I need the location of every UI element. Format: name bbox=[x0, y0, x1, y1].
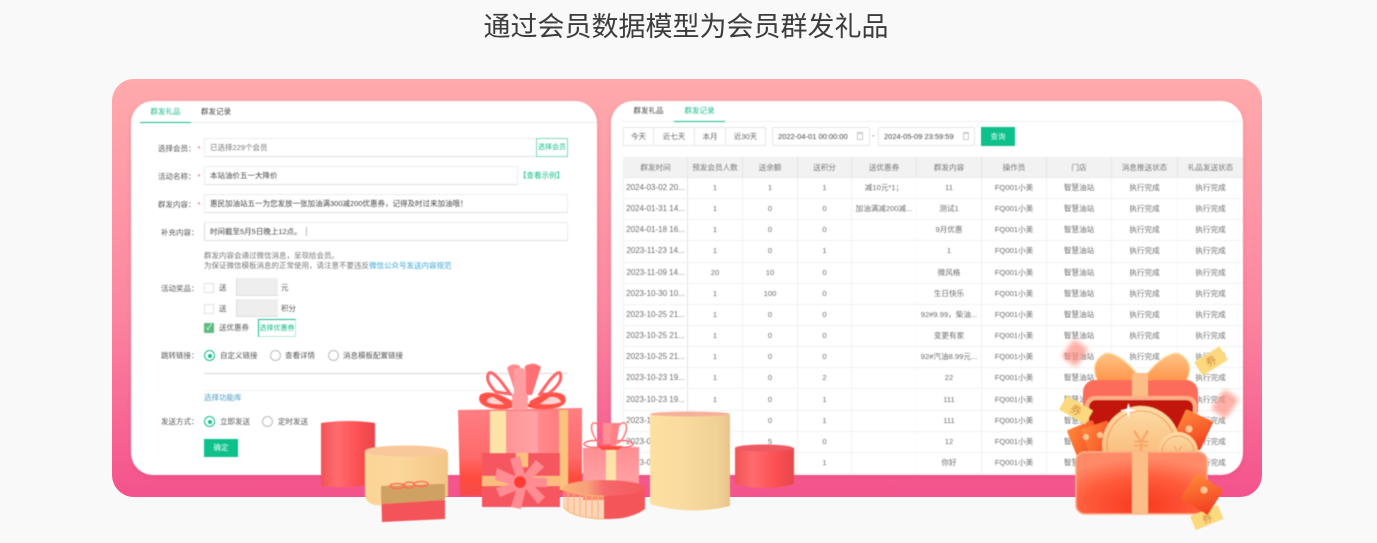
records table: 执行完成 bbox=[1195, 458, 1226, 467]
form tabs bbox=[140, 101, 597, 123]
records table: 智慧油站 bbox=[1064, 289, 1094, 298]
icon: red envelope left bbox=[1067, 420, 1119, 463]
records table: FQ001小美 bbox=[995, 437, 1033, 446]
records table: 0 bbox=[822, 437, 827, 446]
field: campaign prizes: 积分 bbox=[281, 304, 296, 313]
icon: red envelope bottom right bbox=[1180, 473, 1224, 515]
records table: 2023-09-20 10... bbox=[626, 437, 685, 446]
records table: 执行完成 bbox=[1129, 352, 1160, 361]
records table: 0 bbox=[768, 394, 772, 404]
icon: red cylinder left bbox=[321, 421, 375, 487]
records table: 执行完成 bbox=[1195, 310, 1226, 319]
records table: 执行完成 bbox=[1129, 268, 1160, 277]
panel: send gift form bbox=[131, 101, 597, 475]
records table: 0 bbox=[768, 416, 772, 425]
icon: small yuan coin bbox=[1158, 432, 1198, 472]
date range inputs: 2022-04-01 00:00:00 bbox=[778, 132, 848, 141]
records table: 2023-11-09 14... bbox=[626, 268, 685, 277]
records table: FQ001小美 bbox=[995, 204, 1033, 213]
records table: 微风格 bbox=[938, 268, 960, 277]
icon: ticket bottom right bbox=[1190, 505, 1224, 530]
active tab: send records bbox=[674, 101, 725, 122]
help text bbox=[204, 251, 452, 270]
date range shortcuts: 本月 bbox=[702, 132, 718, 141]
icon: short red cylinder bbox=[735, 444, 794, 488]
icon: right open gift box with coins bbox=[1059, 339, 1239, 530]
records table: 门店 bbox=[1071, 163, 1087, 172]
records table: 消息推送状态 bbox=[1122, 163, 1167, 172]
records table: 2024-01-18 16... bbox=[626, 225, 685, 234]
records table: 1 bbox=[713, 331, 717, 340]
records table: 92#汽油8.99元... bbox=[921, 352, 977, 361]
records table: 群发时间 bbox=[640, 163, 671, 172]
field: select members: 选择会员 bbox=[538, 144, 566, 151]
records table: 2024-01-31 14... bbox=[626, 204, 685, 213]
date range shortcuts: 今天 bbox=[631, 132, 646, 141]
records table: 5 bbox=[768, 437, 772, 446]
field: extra content: 补充内容： bbox=[161, 228, 198, 237]
field: campaign prizes bbox=[160, 278, 296, 338]
panel: pink gradient backdrop bbox=[112, 79, 1262, 497]
icon: small yuan coin: ¥ bbox=[1173, 444, 1183, 461]
records table: 1 bbox=[713, 289, 717, 298]
records table: 1 bbox=[713, 204, 717, 213]
records table: 1 bbox=[713, 352, 717, 361]
records table: 0 bbox=[822, 225, 827, 234]
field: select members: 已选择229个会员 bbox=[210, 143, 268, 152]
query button: 查询 bbox=[990, 132, 1006, 141]
icon: large yuan coin: ¥ bbox=[1132, 425, 1150, 458]
field: message content: 群发内容： * bbox=[158, 200, 200, 209]
records table: 92#9.99，柴油... bbox=[921, 310, 977, 319]
records table: 智慧油站 bbox=[1064, 373, 1094, 382]
records table: 1 bbox=[713, 246, 717, 255]
confirm button bbox=[204, 439, 238, 457]
records table: FQ001小美 bbox=[995, 183, 1033, 192]
records table: 生日快乐 bbox=[934, 289, 964, 298]
records table: 执行完成 bbox=[1129, 204, 1160, 213]
records table: 1 bbox=[713, 394, 717, 404]
records table: 0 bbox=[822, 289, 827, 298]
records table: 1 bbox=[713, 416, 717, 425]
icon: blurred red diamond right bbox=[1211, 389, 1239, 419]
records table: FQ001小美 bbox=[995, 416, 1033, 425]
date range inputs: 2024-05-09 23:59:59 bbox=[884, 132, 954, 141]
tab: send records: 群发记录 bbox=[201, 107, 231, 116]
records table: 执行完成 bbox=[1195, 352, 1226, 361]
records table: 0 bbox=[768, 225, 772, 234]
field: message content bbox=[158, 194, 568, 214]
icon: tall tan cylinder bbox=[650, 412, 730, 511]
records table: 群发内容 bbox=[934, 163, 964, 172]
field: campaign prizes: 送 bbox=[219, 304, 226, 313]
records table: 1 bbox=[822, 183, 827, 192]
records table: 2023-10-23 19... bbox=[626, 373, 685, 382]
field: jump link: 查看详情 bbox=[285, 351, 315, 360]
active tab: send gift bbox=[140, 101, 191, 123]
records table: FQ001小美 bbox=[995, 373, 1033, 382]
field: campaign prizes: ✓ bbox=[206, 323, 212, 332]
records table: 执行完成 bbox=[1195, 268, 1226, 277]
icon: middle gift box with flower bow bbox=[482, 453, 560, 509]
records table: 送优惠券 bbox=[869, 163, 899, 172]
field: campaign prizes: 选择优惠券 bbox=[260, 325, 294, 332]
tab: send gift: 群发礼品 bbox=[634, 106, 664, 115]
records table: 2023-10-23 19... bbox=[626, 416, 685, 425]
records table: 智慧油站 bbox=[1064, 204, 1094, 213]
field: campaign name: 本站油价五一大降价 bbox=[210, 171, 278, 180]
records table: 智慧油站 bbox=[1064, 268, 1094, 277]
record tabs bbox=[623, 101, 1243, 122]
records table: 预发会员人数 bbox=[692, 163, 738, 172]
records table: 1 bbox=[768, 183, 772, 192]
records table: 执行完成 bbox=[1195, 246, 1226, 255]
records table: 测试1 bbox=[939, 204, 959, 213]
records table: 智慧油站 bbox=[1064, 225, 1094, 234]
records table: 0 bbox=[822, 310, 827, 319]
field: send method: 定时发送 bbox=[278, 417, 308, 426]
records table: FQ001小美 bbox=[995, 268, 1033, 277]
records table: 111 bbox=[943, 416, 955, 425]
records table: 执行完成 bbox=[1129, 458, 1160, 467]
records table: 送积分 bbox=[813, 163, 836, 172]
field: campaign name: 活动名称： * bbox=[158, 172, 200, 181]
records table: 智慧油站 bbox=[1064, 352, 1094, 361]
field: jump link: 跳转链接： bbox=[161, 351, 198, 360]
icon: round wire box bbox=[563, 480, 645, 519]
icon: ticket top right: 券 bbox=[1202, 351, 1220, 371]
records table: 2023-10-23 19... bbox=[626, 394, 685, 404]
records table: 1 bbox=[713, 458, 717, 467]
date range shortcuts: 近七天 bbox=[663, 132, 685, 141]
field: message content: 惠民加油站五一为您发放一张加油满300减200优惠券，记得及时过来加油哦！ bbox=[210, 199, 468, 208]
records table: 执行完成 bbox=[1129, 183, 1160, 192]
records table: 智慧油站 bbox=[1064, 458, 1094, 467]
records table: 智慧油站 bbox=[1064, 310, 1094, 319]
field: send method bbox=[160, 415, 308, 428]
records table: FQ001小美 bbox=[995, 246, 1033, 255]
records table: 1 bbox=[713, 183, 717, 192]
field: campaign prizes: 送 bbox=[219, 283, 226, 292]
records table: 2023-10-25 21... bbox=[626, 352, 685, 361]
records table: 0 bbox=[768, 310, 772, 319]
records table: 操作员 bbox=[1003, 163, 1025, 172]
records table: 执行完成 bbox=[1195, 394, 1226, 404]
icon: red envelope right bbox=[1173, 409, 1213, 451]
date range shortcuts bbox=[623, 127, 766, 146]
date range inputs: - bbox=[872, 131, 874, 140]
icon: left gift group bbox=[321, 364, 794, 522]
field: jump link: 消息模板配置链接 bbox=[343, 351, 403, 360]
records table: 0 bbox=[768, 246, 772, 255]
records table: 0 bbox=[768, 352, 772, 361]
records table: 智慧油站 bbox=[1064, 183, 1094, 192]
date range shortcuts: 近30天 bbox=[734, 132, 757, 141]
field: jump link bbox=[160, 349, 568, 402]
records table: 1 bbox=[822, 458, 827, 467]
icon: ticket left bbox=[1059, 396, 1093, 424]
field: select members: 选择会员： * bbox=[158, 144, 200, 153]
records table: 2 bbox=[822, 373, 827, 382]
records table: FQ001小美 bbox=[995, 352, 1033, 361]
records table: 1 bbox=[713, 225, 717, 234]
help text: 群发内容会通过微信消息，呈现给会员。 bbox=[204, 251, 339, 260]
records table: FQ001小美 bbox=[995, 289, 1033, 298]
icon: ticket top right bbox=[1194, 346, 1228, 376]
records table: 100 bbox=[764, 289, 776, 298]
records table: 减10元*1； bbox=[865, 183, 903, 192]
records table: 执行完成 bbox=[1195, 289, 1226, 298]
records table: 0 bbox=[822, 331, 827, 340]
icon: box body bbox=[1076, 452, 1207, 514]
icon: open lid bbox=[1083, 373, 1198, 458]
icon: gift bow bbox=[1094, 353, 1190, 382]
records table: 10 bbox=[766, 268, 774, 277]
records table: 执行完成 bbox=[1195, 373, 1226, 382]
records table: 12 bbox=[945, 437, 953, 446]
records table: 2023-10-25 21... bbox=[626, 331, 685, 340]
field: jump link: 选择功能库 bbox=[204, 393, 242, 402]
icon: small right gift box bbox=[583, 421, 639, 500]
records table: 智慧油站 bbox=[1064, 394, 1094, 404]
records table: 执行完成 bbox=[1195, 416, 1226, 425]
query button bbox=[981, 127, 1015, 146]
records table: 2023-11-23 14... bbox=[626, 246, 685, 255]
records table: 送余额 bbox=[759, 163, 781, 172]
active tab: send records: 群发记录 bbox=[684, 106, 714, 115]
records table: FQ001小美 bbox=[995, 458, 1033, 467]
records table: 1 bbox=[713, 437, 717, 446]
icon: large yuan coin bbox=[1102, 406, 1180, 484]
records table: 执行完成 bbox=[1195, 225, 1226, 234]
records table: FQ001小美 bbox=[995, 331, 1033, 340]
records table: 执行完成 bbox=[1195, 183, 1226, 192]
records table: 变更有家 bbox=[934, 331, 964, 340]
records table: 你好 bbox=[941, 458, 957, 467]
field: campaign prizes: 送优惠券 bbox=[219, 323, 249, 332]
records table: 1 bbox=[947, 246, 951, 255]
records table: 执行完成 bbox=[1195, 437, 1226, 446]
records table: 2024-03-02 20... bbox=[626, 183, 685, 192]
records table: FQ001小美 bbox=[995, 310, 1033, 319]
records table: 0 bbox=[822, 204, 827, 213]
field: campaign name: 【查看示例】 bbox=[519, 171, 564, 180]
records table: 9月优惠 bbox=[935, 225, 962, 234]
panel: send records table bbox=[611, 101, 1243, 475]
icon: small gift box bbox=[381, 482, 445, 522]
records table: 2023-10-25 21... bbox=[626, 310, 685, 319]
records table: FQ001小美 bbox=[995, 394, 1033, 404]
records table bbox=[623, 157, 1243, 474]
records table: 11 bbox=[945, 183, 953, 192]
records table: 智慧油站 bbox=[1064, 416, 1094, 425]
records table: 执行完成 bbox=[1129, 246, 1160, 255]
records table: 1 bbox=[713, 373, 717, 382]
field: campaign name bbox=[158, 166, 564, 186]
records table: 0 bbox=[822, 352, 827, 361]
field: extra content: 时间截至5月5日晚上12点。 bbox=[210, 227, 302, 236]
records table: 执行完成 bbox=[1129, 331, 1160, 340]
records table: 0 bbox=[768, 373, 772, 382]
records table: 执行完成 bbox=[1129, 394, 1160, 404]
icon: large gift box bbox=[458, 408, 582, 496]
icon: ticket left: 券 bbox=[1067, 400, 1085, 420]
field: send method: 发送方式： bbox=[161, 417, 198, 426]
confirm button: 确定 bbox=[214, 443, 228, 452]
records table: 加油满减200减... bbox=[856, 204, 912, 213]
records table: 1 bbox=[822, 416, 827, 425]
records table: 1 bbox=[713, 310, 717, 319]
icon: large gift bow bbox=[479, 364, 566, 410]
icon: tan cylinder bbox=[365, 446, 448, 506]
field: jump link: 自定义链接 bbox=[220, 351, 258, 360]
icon: sparkle bbox=[1120, 403, 1137, 418]
records table: 执行完成 bbox=[1129, 310, 1160, 319]
records table: 1 bbox=[822, 246, 827, 255]
field: send method: 立即发送 bbox=[220, 417, 250, 426]
records table: 执行完成 bbox=[1129, 437, 1160, 446]
icon: ticket bottom right: 券 bbox=[1199, 509, 1214, 526]
records table: 2023-09-12 16... bbox=[626, 458, 685, 467]
records table: 智慧油站 bbox=[1064, 437, 1094, 446]
date range inputs bbox=[772, 127, 975, 146]
field: select members bbox=[158, 137, 569, 158]
records table: 智慧油站 bbox=[1064, 246, 1094, 255]
field: campaign prizes: 活动奖品： bbox=[161, 284, 198, 293]
help text: 为保证微信模板消息的正常使用，请注意不要违反微信公众号发送内容规范 bbox=[204, 261, 452, 270]
records table: 执行完成 bbox=[1129, 225, 1160, 234]
records table: 0 bbox=[822, 268, 827, 277]
records table: 执行完成 bbox=[1129, 416, 1160, 425]
records table: 111 bbox=[943, 394, 955, 404]
records table: 20 bbox=[711, 268, 719, 277]
icon: blurred red diamond left bbox=[1061, 339, 1089, 367]
active tab: send gift: 群发礼品 bbox=[150, 107, 180, 116]
records table: FQ001小美 bbox=[995, 225, 1033, 234]
records table: 22 bbox=[945, 373, 953, 382]
records table: 执行完成 bbox=[1195, 204, 1226, 213]
title: 通过会员数据模型为会员群发礼品 bbox=[484, 5, 888, 44]
records table: 执行完成 bbox=[1195, 331, 1226, 340]
records table: 0 bbox=[768, 204, 772, 213]
records table: 1 bbox=[822, 394, 827, 404]
records table: 0 bbox=[768, 331, 772, 340]
records table: 2023-10-30 10... bbox=[626, 289, 685, 298]
field: campaign prizes: 元 bbox=[281, 283, 288, 292]
field: extra content bbox=[160, 222, 568, 242]
records table: 执行完成 bbox=[1129, 289, 1160, 298]
records table: 礼品发送状态 bbox=[1188, 163, 1233, 172]
records table: 执行完成 bbox=[1129, 373, 1160, 382]
records table: 智慧油站 bbox=[1064, 331, 1094, 340]
